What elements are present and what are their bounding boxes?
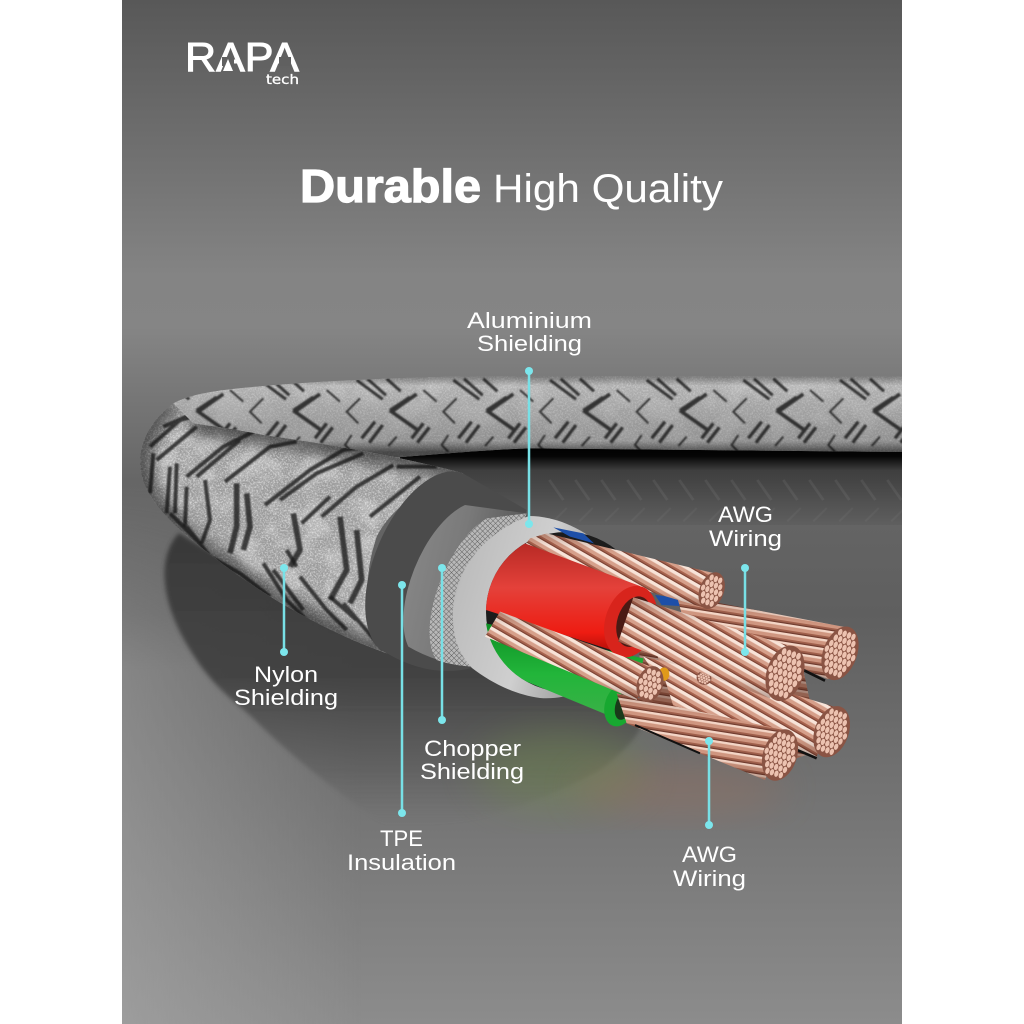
back section of braided cable	[174, 376, 902, 458]
title	[300, 160, 723, 212]
logo wordmark: RAPA	[185, 34, 300, 80]
title light words: High Quality	[493, 167, 723, 211]
coloured floor glow: green	[475, 730, 645, 810]
inner strand core behind wires	[639, 650, 810, 758]
callout: chopper shielding	[420, 564, 524, 784]
background panel	[122, 0, 902, 1024]
callout: chopper shielding: Chopper	[424, 736, 521, 761]
wire 1: top	[520, 533, 730, 613]
callout: AWG wiring upper: AWG	[718, 502, 773, 527]
wire 7: small inner	[643, 657, 713, 687]
blue inner wire	[553, 527, 690, 607]
coloured floor glow: copper	[599, 767, 760, 811]
callout: nylon shielding	[234, 564, 338, 710]
callout: nylon shielding: Shielding	[234, 685, 338, 710]
shadow under back cable	[400, 447, 902, 525]
callout: TPE insulation	[347, 581, 456, 875]
callout: aluminium shielding: Shielding	[477, 331, 582, 356]
orange inner wire	[659, 667, 669, 681]
logo arrow notch	[223, 59, 233, 71]
title bold word: Durable	[300, 160, 481, 212]
callout: aluminium shielding: Aluminium	[467, 308, 592, 333]
wire 3: front centre	[618, 597, 811, 706]
background left lighting	[122, 529, 292, 1024]
callout: TPE insulation: TPE	[380, 826, 423, 851]
floor shadow	[162, 532, 640, 792]
callout: chopper shielding: Shielding	[420, 759, 524, 784]
wire 4: lower left	[485, 612, 668, 705]
callout: AWG wiring lower: AWG	[682, 842, 737, 867]
callout: aluminium shielding	[467, 308, 592, 528]
callout: AWG wiring lower	[673, 737, 746, 891]
aluminium sleeve	[452, 516, 588, 698]
reflected braid on floor	[548, 480, 902, 500]
callout: TPE insulation: Insulation	[347, 850, 456, 875]
callout: AWG wiring upper	[709, 502, 782, 656]
callout: AWG wiring upper: Wiring	[709, 526, 782, 551]
wire 5: lower right	[657, 653, 857, 762]
product illustration: braided cable	[122, 370, 907, 1024]
copper knurled shielding	[430, 513, 527, 667]
logo crossbar mask first A	[222, 57, 234, 66]
callout: AWG wiring lower: Wiring	[673, 866, 746, 891]
TPE outer dark band	[365, 471, 527, 671]
front section of braided cable	[130, 397, 470, 660]
TPE insulation light band	[403, 505, 527, 667]
green insulation	[486, 623, 643, 731]
red insulation	[486, 544, 656, 658]
cable body	[130, 370, 907, 671]
callout: nylon shielding: Nylon	[254, 662, 318, 687]
logo	[185, 34, 300, 88]
wires and insulation	[485, 527, 866, 785]
logo crossbar mask second A	[279, 57, 291, 66]
sleeve opening	[486, 532, 646, 692]
wire 2: back right	[678, 600, 858, 682]
wire 6: front lower	[617, 693, 804, 785]
logo subline: tech	[266, 73, 299, 88]
